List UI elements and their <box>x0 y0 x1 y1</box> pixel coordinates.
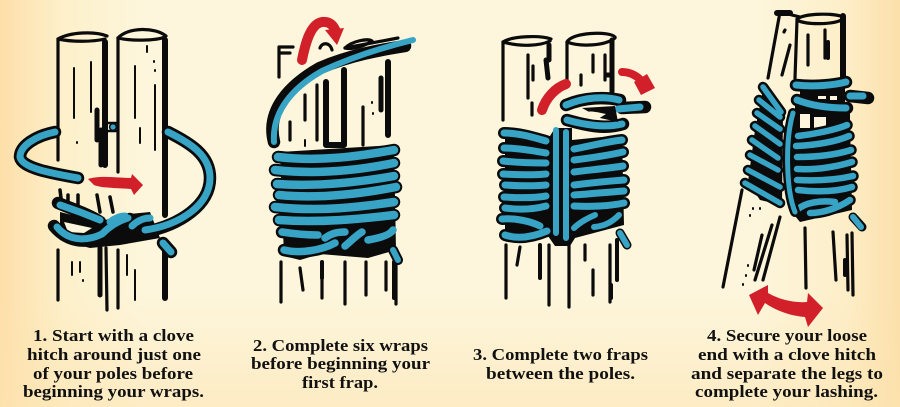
panel: step 3 fraps <box>502 33 655 307</box>
poles <box>723 12 853 295</box>
caption 4: end with a clove hitch <box>698 345 876 364</box>
red arrow up and over <box>302 22 344 60</box>
caption 4: and separate the legs to <box>691 364 883 383</box>
wraps and vertical fraps <box>502 128 624 246</box>
left tilted wraps <box>745 85 783 205</box>
caption 2: 2. Complete six wraps <box>253 336 429 355</box>
panel: step 1 clove hitch <box>20 29 210 310</box>
panel: step 2 wraps <box>272 22 413 304</box>
caption 2: first frap. <box>302 373 378 392</box>
caption 1: of your poles before <box>33 364 193 383</box>
red arrow right <box>88 174 143 195</box>
clove hitch and tail <box>566 98 645 245</box>
clove hitch and tail <box>796 82 868 109</box>
rope rising from wraps <box>272 38 413 142</box>
caption 1: beginning your wraps. <box>23 382 204 401</box>
caption 2: before beginning your <box>251 354 430 373</box>
rope loop around poles <box>20 124 210 252</box>
caption 4 <box>691 326 883 401</box>
right wraps and frap <box>788 100 862 227</box>
caption 4: complete your lashing. <box>695 382 878 401</box>
caption 1 <box>23 326 204 401</box>
caption 2 <box>251 336 430 392</box>
poles <box>58 29 166 310</box>
caption 1: hitch around just one <box>27 345 201 364</box>
red double arrow <box>749 285 823 327</box>
caption 4: 4. Secure your loose <box>707 326 867 345</box>
poles <box>279 40 396 304</box>
red arrow left curve <box>542 84 566 110</box>
caption 3: between the poles. <box>486 364 635 383</box>
caption 1: 1. Start with a clove <box>33 326 194 345</box>
wraps <box>275 145 398 260</box>
caption 3: 3. Complete two fraps <box>473 345 649 364</box>
poles <box>503 33 617 307</box>
red arrow right curve <box>622 72 655 95</box>
caption 3 <box>473 345 649 383</box>
panel: step 4 separated legs <box>723 12 868 327</box>
